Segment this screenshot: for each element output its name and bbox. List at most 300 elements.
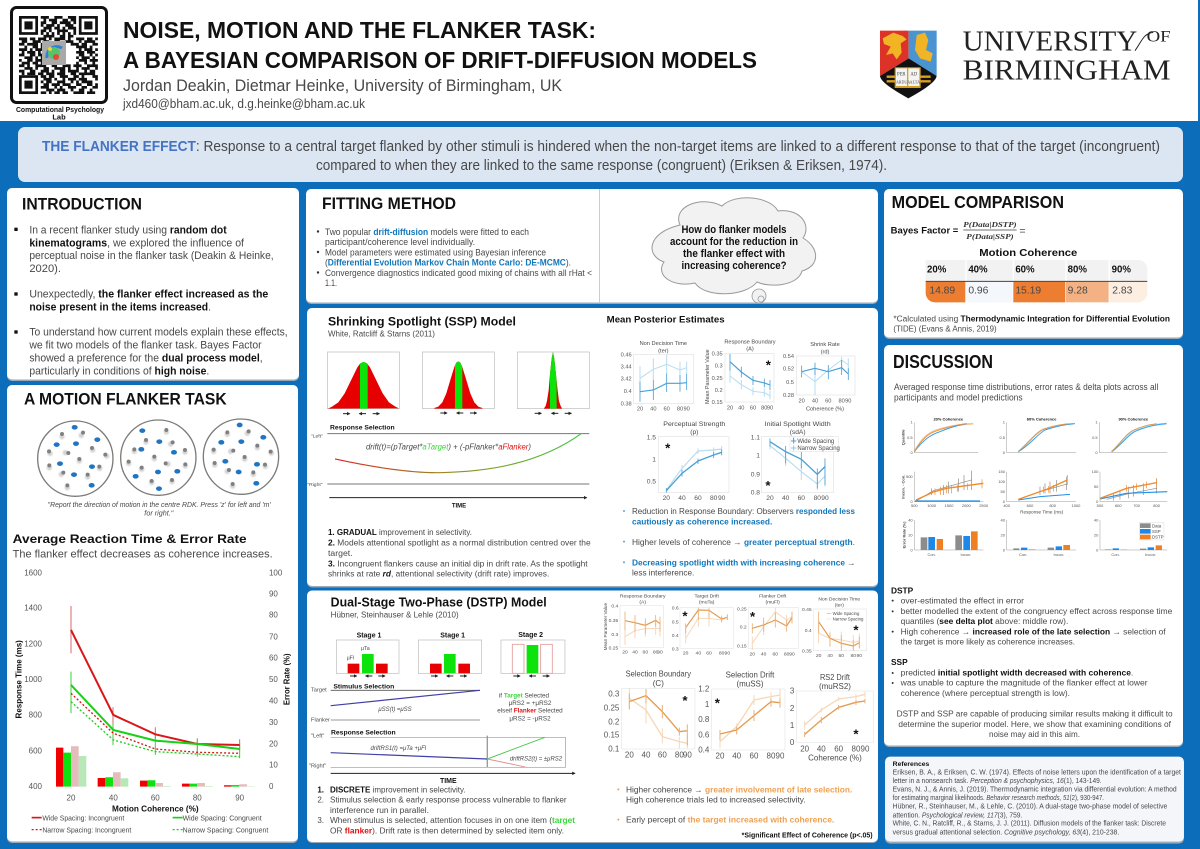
chart: DSTP non decision time: 20	[816, 653, 822, 659]
charts row: delta plots: 800	[1049, 503, 1057, 508]
chart: DSTP response boundary: Mean Parameter Value	[603, 602, 608, 650]
charts row: response time distributions: Quantile	[900, 429, 905, 445]
charts row: response time distributions: 0.5	[1092, 435, 1098, 440]
panel: the flanker effect: compared to when they are linked to the same response (congruent) (Eriksen & Eriksen, 1974).	[316, 157, 887, 174]
table: Bayes factors: 2.83	[1112, 286, 1133, 297]
wordmark	[963, 26, 1171, 86]
x axis labels: 20	[67, 794, 76, 803]
SSP description: shrinks at rate rd, attentional selectivity (drift rate) improves.	[328, 569, 549, 578]
chart: target drift: 90	[725, 650, 730, 656]
chart: perceptual strength: 90	[718, 495, 726, 502]
footnote: TIDE	[893, 315, 1170, 334]
right axis labels	[269, 568, 283, 791]
DSTP description	[317, 785, 575, 835]
conclusion: DSTP and SSP are capable of producing similar results making it difficult to	[897, 708, 1173, 718]
legend: Wide Spacing: Incongruent	[42, 813, 124, 822]
caption: task instruction: for right."	[144, 510, 174, 517]
legend	[790, 437, 840, 452]
chart: selection boundary: 0.3	[608, 690, 620, 699]
chart: RS2 drift: 90	[861, 745, 870, 754]
chart: selection boundary: 20	[625, 751, 634, 760]
chart: initial spotlight width: 80	[814, 495, 821, 502]
left axis labels: 600	[29, 746, 43, 755]
diagram: response selection: drift(t)=(pTarget*aTarget) + (-pFlanker*aFlanker)	[366, 443, 531, 452]
charts row: response time distributions: 0	[1003, 450, 1006, 455]
chart: perceptual strength	[647, 421, 729, 502]
method bullets: (Differential Evolution Markov Chain Monte Carlo: DE-MCMC).	[325, 258, 571, 268]
intro text	[894, 382, 1158, 403]
charts row: error rates: 0	[1096, 547, 1099, 552]
x axis title: Motion Coherence (%)	[112, 804, 199, 814]
DSTP description: DISCRETE improvement in selectivity.	[330, 785, 466, 794]
heading: model comparison: MODEL COMPARISON	[892, 192, 1064, 212]
bullet list: particularly in conditions of high noise.	[29, 365, 209, 377]
diagram: response selection: TIME	[452, 504, 466, 510]
stage 2 rule: μRS2 = -μRS2	[509, 715, 551, 722]
icon: QR code	[12, 8, 106, 102]
legend: Data	[1152, 523, 1162, 528]
chart: RS2 drift: 80	[852, 745, 861, 754]
reference list: letter in a nonsearch task. Perception & psychophysics, 16(1), 143-149.	[893, 778, 1102, 785]
chart: DSTP non decision time: 0.4	[805, 628, 812, 634]
charts row: response time distributions: 0.5	[907, 435, 913, 440]
legend: SSP	[1152, 529, 1161, 534]
panel: discussion	[884, 345, 1183, 747]
chart: non decision time: 80	[677, 407, 683, 413]
chart: perceptual strength: 20	[663, 495, 670, 502]
chart: initial spotlight width: 40	[782, 495, 790, 502]
chart: DSTP response boundary: 0.3	[611, 632, 619, 638]
method bullets: Model parameters were estimated using Bayesian inference	[325, 248, 546, 258]
charts row: delta plots: 600	[1115, 503, 1122, 508]
stage 1 late	[418, 633, 482, 676]
chart: non decision time: 0.4	[624, 389, 632, 395]
x axis labels: 90	[235, 794, 245, 803]
chart: DSTP response boundary: 0.25	[609, 646, 619, 652]
chart: flanker drift: Flanker Drift	[759, 594, 787, 600]
charts row: delta plots: 800	[1153, 503, 1161, 508]
wordmark: BIRMINGHAM	[963, 54, 1171, 86]
right axis labels: 20	[269, 739, 278, 748]
chart: selection drift: 1	[705, 700, 710, 709]
charts row: delta plots: 100	[998, 479, 1006, 484]
chart: selection drift: 20	[716, 751, 725, 760]
left axis labels: 800	[29, 710, 43, 719]
right axis labels: 50	[269, 675, 278, 684]
chart: RS2 drift: 1	[790, 721, 795, 730]
chart: response boundary: 90	[767, 405, 773, 411]
bullet list: Unexpectedly, the flanker effect increased as the	[29, 289, 268, 301]
chart: initial spotlight width: Initial Spotlight Width	[765, 421, 831, 428]
bullet list: perceptual noise in the flanker task (Deakin & Heinke,	[29, 250, 274, 262]
DSTP results bullets	[617, 785, 852, 825]
chart: non decision time: Non Decision Time	[640, 341, 687, 347]
chart: initial spotlight width: *	[765, 478, 771, 493]
chart: initial spotlight width: (sdA)	[790, 429, 806, 436]
panel: introduction	[7, 188, 299, 381]
legend	[32, 813, 268, 834]
stage 1 late: Stage 1	[440, 633, 465, 640]
error bars	[71, 606, 240, 751]
right axis labels: 30	[269, 718, 278, 727]
heading: SSP model: Shrinking Spotlight (SSP) Model	[328, 314, 516, 328]
chart: selection boundary: 0.1	[608, 745, 620, 754]
chart: target drift: 60	[706, 650, 712, 656]
chart: RS2 drift: 0	[790, 738, 795, 747]
chart: flanker drift: 0.2	[740, 625, 747, 631]
title	[123, 17, 757, 73]
chart: DSTP non decision time: 60	[839, 653, 844, 659]
diagram: response selection: "Left"	[311, 733, 324, 739]
wordmark: OF	[1147, 29, 1171, 46]
equation: Bayes factor: P(Data|DSTP)	[963, 220, 1017, 229]
charts row: delta plots: 150	[998, 469, 1006, 474]
chart: selection boundary: *	[682, 693, 688, 708]
left axis labels: 1600	[24, 568, 43, 577]
chart: target drift: 20	[683, 650, 689, 656]
chart: shrink rate: 0.54	[783, 354, 794, 360]
chart: shrink rate: (rd)	[821, 349, 829, 355]
citation: Hübner, Steinhauser & Lehle (2010)	[331, 611, 459, 620]
chart: selection boundary	[604, 670, 695, 760]
charts row: delta plots: 1000	[1072, 503, 1081, 508]
charts row: error rates: 20	[1094, 532, 1099, 537]
DSTP findings: quantiles (see delta plot above: middle row).	[901, 616, 1068, 626]
SSP description	[328, 528, 591, 578]
DSTP description: 2.	[317, 796, 324, 805]
spotlight: narrow	[517, 352, 589, 413]
diagram: stimulus selection: Stimulus Selection	[333, 684, 394, 691]
panel: shrinking spotlight model	[307, 308, 878, 588]
chart: non decision time: 0.38	[621, 401, 632, 407]
method bullets	[317, 227, 592, 288]
diagram: stimulus selection: μSS(t) =μSS	[377, 707, 412, 713]
callout: thought cloud: How do flanker models	[682, 224, 786, 236]
chart: selection boundary: 80	[675, 751, 684, 760]
chart: DSTP non decision time: Wide Spacing	[833, 611, 860, 616]
legend: Wide Spacing	[797, 439, 834, 445]
DSTP results bullets: High coherence trials led to increased selectivity.	[626, 795, 806, 804]
caption: task instruction: "Report the direction of motion in the centre RDK. Press 'z' for left and 'm'	[48, 502, 271, 509]
chart: target drift: 40	[696, 650, 701, 656]
chart: RS2 drift: *	[853, 727, 859, 742]
spotlight: wide	[327, 352, 399, 414]
chart: selection drift: *	[715, 696, 721, 711]
legend: Wide Spacing: Congruent	[183, 813, 262, 822]
chart: initial spotlight width: 60	[798, 495, 805, 502]
chart: selection boundary: 90	[683, 751, 692, 760]
chart: shrink rate: 0.28	[783, 393, 794, 399]
chart: shrink rate: 40	[812, 399, 818, 405]
chart: flanker drift: 60	[773, 652, 778, 658]
charts row: delta plots: 400	[1003, 503, 1011, 508]
chart: non decision time	[621, 341, 693, 413]
icon: crest: PER	[897, 72, 906, 77]
chart: initial spotlight width: 1.1	[751, 434, 760, 441]
DSTP description: Stimulus selection & early response process vulnerable to flanker	[330, 796, 567, 805]
diagram: response selection: Response Selection	[331, 729, 396, 736]
table: Bayes factors: 80%	[1068, 265, 1087, 276]
right axis labels: 100	[269, 568, 283, 577]
equation: Bayes factor	[891, 220, 1026, 241]
chart: DSTP non decision time: 80	[851, 653, 856, 659]
equation: Bayes factor: P(Data|SSP)	[966, 232, 1014, 241]
chart: RS2 drift: 60	[834, 745, 844, 754]
reference list	[893, 769, 1181, 836]
chart: non decision time: 20	[637, 407, 643, 413]
callout: thought cloud	[652, 198, 816, 303]
charts row: delta plots: 2500	[979, 503, 989, 508]
diagram: response selection: driftRS1(t) =μTa +μFl	[371, 746, 427, 752]
footnote: significance: *Significant Effect of Coherence (p<.05)	[742, 830, 873, 839]
SSP results bullets: less interference.	[632, 569, 694, 578]
chart: DSTP response boundary: 40	[632, 650, 638, 656]
chart: selection drift: 0.8	[698, 715, 710, 724]
charts row: delta plots: 0	[1096, 499, 1099, 504]
chart: target drift: *	[682, 609, 688, 624]
left axis labels	[24, 568, 43, 791]
right axis labels: 40	[269, 697, 278, 706]
reference list: for estimating marginal likelihoods. Behavior research methods, 51(2), 930-947.	[893, 795, 1104, 802]
chart: response boundary: 60	[750, 405, 756, 411]
chart: selection boundary: 40	[642, 751, 651, 760]
chart: DSTP non decision time: 0.35	[802, 649, 812, 655]
chart: DSTP response boundary: 0.4	[611, 604, 619, 610]
SSP results bullets: Decreasing spotlight width with increasing coherence →	[632, 559, 856, 568]
table: Bayes factors: 0.96	[968, 286, 989, 297]
bullet list: kinematograms, we explored the influence of	[29, 237, 245, 249]
reference list: Eriksen, B. A., & Eriksen, C. W. (1974). Effects of noise letters upon the identification of a target	[893, 769, 1181, 776]
diagram: random dot kinematograms	[38, 419, 279, 496]
stage 1 early	[336, 633, 399, 676]
chart: target drift: 0.4	[672, 633, 679, 639]
chart: DSTP non decision time: 90	[857, 653, 862, 659]
chart: response boundary: 20	[727, 405, 733, 411]
charts row: delta plots: 100	[1092, 469, 1099, 474]
chart: shrink rate	[783, 342, 855, 413]
chart: RS2 drift: (muRS2)	[819, 682, 851, 691]
heading: DSTP model: Dual-Stage Two-Phase (DSTP) Model	[331, 596, 547, 610]
charts row: delta plots: 1000	[927, 503, 937, 508]
chart: initial spotlight width: 90	[821, 495, 829, 502]
charts row: delta plots: 0	[1003, 499, 1006, 504]
left axis labels: 400	[29, 782, 43, 791]
right axis labels: 0	[269, 782, 274, 791]
chart: target drift: Target Drift	[694, 594, 719, 600]
x axis labels: 60	[151, 794, 160, 803]
chart: initial spotlight width: 1	[756, 453, 760, 460]
DSTP description: OR flanker). Drift rate is then determined by selected item only.	[330, 826, 564, 835]
chart: perceptual strength: 80	[710, 495, 718, 502]
panel: references	[885, 757, 1184, 844]
chart: perceptual strength: 1.5	[647, 434, 656, 441]
DSTP description: 3.	[317, 816, 324, 825]
chart: selection drift: 80	[767, 751, 776, 760]
stage 2 rule	[497, 692, 563, 722]
SSP findings: SSP	[891, 657, 908, 667]
SSP description: 1. GRADUAL improvement in selectivity.	[328, 528, 472, 537]
table: Bayes factors: 90%	[1112, 265, 1131, 276]
icon: crest: AD	[910, 72, 918, 77]
chart: selection drift: (muSS)	[736, 680, 764, 689]
charts row: error rates: 0	[910, 547, 913, 552]
emails: jxd460@bham.ac.uk, d.g.heinke@bham.ac.uk	[122, 97, 366, 111]
DSTP findings: the target is more likely as coherence increases.	[901, 637, 1075, 647]
legend: Narrow Spacing: Incongruent	[42, 825, 131, 834]
heading: mean posterior estimates: Mean Posterior Estimates	[607, 315, 725, 325]
charts row: response time distributions	[900, 417, 1167, 455]
intro text: participants and model predictions	[894, 393, 1023, 403]
diagram: response selection: "Left"	[311, 433, 323, 439]
charts row: error rates: 40	[908, 517, 913, 522]
diagram: response selection: TIME	[440, 778, 457, 785]
chart: flanker drift: *	[750, 609, 756, 624]
conclusion: determine the superior model. Here, we show that examining conditions of	[898, 719, 1172, 729]
charts row: delta plots: Incon. - Con.	[900, 475, 905, 499]
SSP description: 3. Incongruent flankers cause an initial dip in drift rate. As the spotlight	[328, 559, 588, 568]
method bullets: participant/coherence level individually.	[325, 237, 475, 247]
charts row: error rates: Incon.	[1054, 552, 1064, 557]
chart: DSTP response boundary: (A)	[639, 600, 646, 606]
chart: DSTP response boundary	[603, 594, 666, 656]
stage 2 rule: if Target Selected	[499, 692, 550, 699]
charts row: delta plots	[900, 469, 1167, 514]
bullet list: we fit two models of the flanker task. Bayes Factor	[28, 340, 262, 352]
bullet list: 2020).	[29, 263, 61, 275]
chart: non decision time: (ter)	[658, 348, 669, 354]
chart: RS2 drift: 40	[817, 745, 826, 754]
charts row: delta plots: 700	[1133, 503, 1141, 508]
legend: Narrow Spacing	[797, 446, 840, 452]
chart: DSTP response boundary: 20	[622, 650, 628, 656]
line: wide spacing incongruent	[71, 630, 240, 745]
chart: shrink rate: Coherence (%)	[806, 407, 844, 413]
panel: model comparison	[884, 189, 1183, 339]
chart: flanker drift: 0.25	[737, 606, 747, 612]
lab caption: Computational Psychology	[16, 105, 105, 114]
DSTP results bullets: Early percept of the target increased with coherence.	[626, 816, 834, 825]
chart: response boundary: 0.15	[712, 400, 723, 406]
chart: response boundary	[705, 339, 776, 411]
chart: RS2 drift: 20	[800, 745, 810, 754]
heading: introduction: INTRODUCTION	[22, 194, 142, 213]
chart: reaction time and error rate	[15, 568, 292, 834]
method bullets: 1.1.	[325, 278, 337, 288]
bullet list: showed a preference for the dual process model,	[29, 352, 263, 364]
chart: shrink rate: 0.5	[786, 380, 794, 386]
chart: selection drift	[698, 671, 785, 760]
citation: White, Ratcliff & Starns (2011)	[328, 330, 435, 339]
bullet list: To understand how current models explain these effects,	[29, 327, 288, 339]
chart: shrink rate: 60	[825, 399, 831, 405]
heading: discussion: DISCUSSION	[893, 352, 993, 372]
chart: response boundary: (A)	[746, 346, 754, 352]
charts row: error rates: Con.	[1111, 552, 1120, 557]
line: wide spacing congruent	[71, 685, 240, 749]
charts row: response time distributions: 20% Coherence	[933, 417, 964, 422]
chart: response boundary: 0.3	[715, 364, 723, 370]
diagram: stimulus selection	[311, 684, 480, 724]
line: narrow spacing congruent	[71, 702, 240, 757]
references heading: References	[893, 761, 930, 768]
reference list: White, C. N., Ratcliff, R., & Starns, J. J. (2011). Diffusion models of the flanker task: Discrete	[893, 821, 1166, 828]
heading: average reaction time and error rate: Average Reaction Time & Error Rate	[13, 532, 247, 546]
reference list: attention. Psychological review, 117(3), 759.	[893, 812, 1022, 819]
charts row: response time distributions: 90% Coherence	[1118, 417, 1149, 422]
method bullets: Two popular drift-diffusion models were fitted to each	[325, 227, 529, 237]
charts row: error rates: 20	[1001, 532, 1006, 537]
stage 1 early: Stage 1	[357, 633, 382, 640]
stage 1 early: μTa	[361, 646, 370, 652]
reference list: versus gradual attentional selection. Cognitive psychology, 63(4), 210-238.	[893, 829, 1119, 836]
chart: perceptual strength: 1	[652, 456, 656, 463]
spotlight: medium	[422, 352, 494, 413]
header band	[0, 0, 1198, 122]
chart: flanker drift: 0.15	[737, 644, 747, 650]
DSTP findings	[891, 585, 1173, 647]
chart: response boundary: Mean Parameter Value	[705, 349, 711, 404]
intro text: Averaged response time distributions, error rates & delta plots across all	[894, 382, 1158, 392]
reference list: Hübner, R., Steinhauser, M., & Lehle, C. (2010). A dual-stage two-phase model of selective	[893, 803, 1167, 810]
chart: shrink rate: 0.52	[783, 367, 794, 373]
chart: DSTP response boundary: Response Boundary	[620, 594, 666, 600]
chart: DSTP response boundary: 0.35	[609, 618, 619, 624]
chart: target drift: (muTa)	[699, 599, 715, 605]
legend: DSTP	[1152, 535, 1164, 540]
chart: RS2 drift: 3	[790, 687, 795, 696]
chart: selection drift: 40	[732, 751, 742, 760]
x axis labels: 40	[109, 794, 118, 803]
chart: response boundary: 80	[761, 405, 767, 411]
lab caption: Lab	[52, 112, 66, 122]
panel: the flanker effect	[18, 127, 1183, 182]
chart: selection drift: 0.6	[698, 730, 710, 739]
charts row: response time distributions: 0	[910, 450, 913, 455]
charts row: error rates: Incon.	[1145, 552, 1156, 557]
caption: task instruction	[48, 502, 271, 517]
chart: non decision time: 0.46	[621, 352, 632, 358]
wordmark: UNIVERSITY	[963, 26, 1137, 58]
icon: crest: ALTA	[909, 79, 921, 84]
charts row: delta plots: 500	[911, 503, 918, 508]
chart: non decision time: 3.44	[621, 365, 632, 371]
chart: target drift: 0.5	[672, 620, 679, 626]
chart: perceptual strength: *	[665, 441, 671, 456]
charts row: delta plots: 2000	[962, 503, 972, 508]
SSP findings: coherence (where perceptual strength is low).	[901, 688, 1070, 698]
chart: shrink rate: 20	[798, 399, 805, 405]
reference list: Evans, N. J., & Annis, J. (2019). Thermodynamic integration via differential evolution: A method	[893, 787, 1177, 794]
DSTP findings: over-estimated the effect in error	[901, 595, 1024, 605]
charts row: delta plots: 600	[1027, 503, 1034, 508]
stage 2	[501, 632, 565, 676]
title: NOISE, MOTION AND THE FLANKER TASK:	[123, 17, 596, 43]
legend	[1139, 522, 1164, 540]
chart: DSTP non decision time: Non Decision Time	[818, 597, 860, 603]
conclusion	[897, 708, 1173, 739]
stage 1 early: μFl	[347, 656, 354, 662]
diagram: stimulus selection: Target	[311, 687, 327, 693]
chart: flanker drift: 80	[784, 652, 790, 658]
chart: response boundary: 0.35	[712, 351, 723, 357]
diagram: stimulus selection: Flanker	[311, 718, 330, 724]
chart: DSTP non decision time: 0.45	[802, 607, 812, 613]
chart: shrink rate: 90	[845, 399, 851, 405]
chart: target drift	[672, 594, 733, 656]
chart: selection boundary: 0.25	[604, 703, 620, 712]
diagram: response selection	[309, 729, 575, 785]
chart: RS2 drift: RS2 Drift	[820, 673, 851, 682]
